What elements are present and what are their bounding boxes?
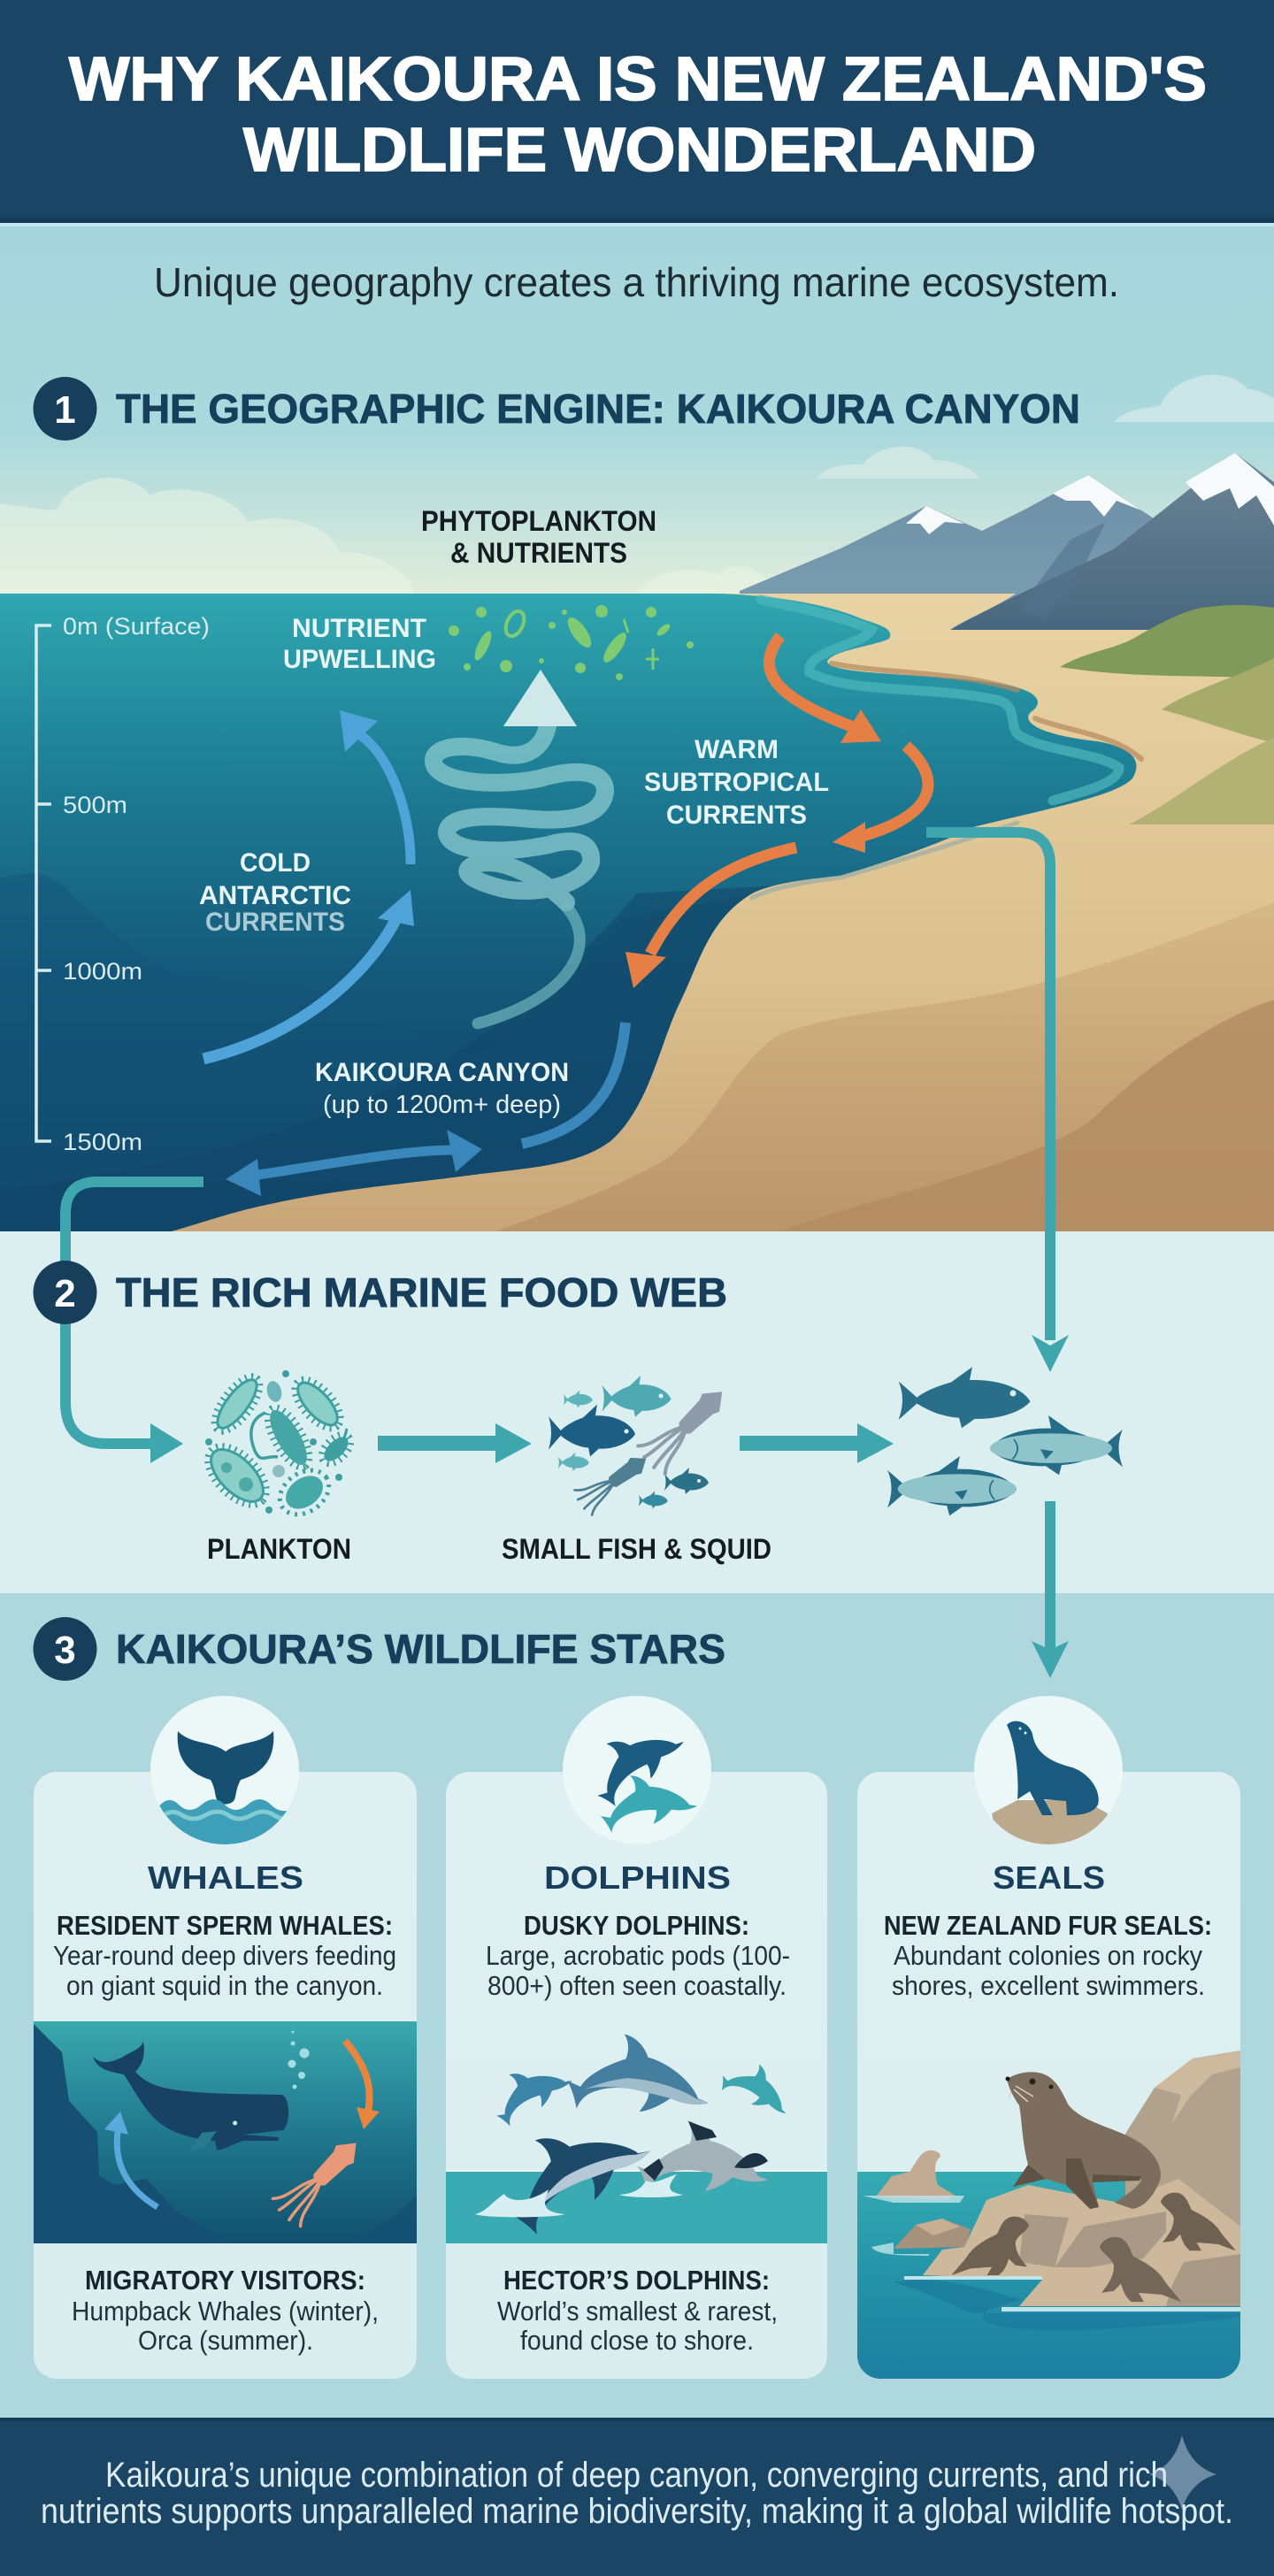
- lagoon highlights and shoreline: [752, 600, 1141, 898]
- undersea hills: [0, 874, 796, 1231]
- depth scale: 0m (Surface): [63, 613, 210, 640]
- water labels: NUTRIENT: [292, 614, 426, 643]
- arrow: small fish to large fish: [740, 1423, 894, 1463]
- panel: wildlife stars background: [0, 1593, 1274, 2418]
- connector arrow: fish to wildlife stars: [1032, 1501, 1069, 1678]
- card heading: SEALS: [993, 1859, 1105, 1896]
- hector's dolphins text: World’s smallest & rarest,: [497, 2296, 778, 2327]
- fur seals text: shores, excellent swimmers.: [892, 1970, 1205, 2001]
- water labels: CURRENTS: [666, 801, 807, 830]
- resident whales text: RESIDENT SPERM WHALES:: [57, 1910, 393, 1941]
- depth scale: [36, 613, 210, 1155]
- hector's dolphins text: HECTOR’S DOLPHINS:: [503, 2265, 770, 2296]
- migratory visitors text: Orca (summer).: [138, 2325, 313, 2356]
- connector arrow: canyon to plankton: [65, 1182, 203, 1463]
- spiral upwelling arrow: [434, 670, 605, 1024]
- water labels: UPWELLING: [283, 645, 436, 674]
- connector arrow: canyon to predatory fish: [926, 832, 1069, 1372]
- title: WHY KAIKOURA IS NEW ZEALAND'S: [69, 44, 1207, 113]
- phytoplankton particles: [449, 605, 694, 680]
- phytoplankton label: & NUTRIENTS: [450, 537, 627, 569]
- cold Antarctic current arrows: [203, 710, 414, 1059]
- depth scale: 1500m: [63, 1129, 142, 1155]
- water labels: COLD: [240, 848, 311, 878]
- resident whales text: on giant squid in the canyon.: [66, 1970, 383, 2001]
- resident whales text: Year-round deep divers feeding: [53, 1940, 396, 1971]
- depth scale: 500m: [63, 792, 127, 818]
- migratory visitors text: [72, 2265, 379, 2356]
- resident whales text: [53, 1910, 396, 2001]
- green hills: [1060, 605, 1274, 824]
- card: seals: [857, 1696, 1240, 2379]
- phytoplankton label: PHYTOPLANKTON: [421, 505, 656, 537]
- footer summary: [41, 2456, 1233, 2531]
- warm subtropical current arrows: [625, 636, 928, 988]
- depth scale: 1000m: [63, 958, 142, 985]
- card: dolphins: [446, 1696, 827, 2379]
- dusky dolphins text: [486, 1910, 790, 2001]
- mountains: [740, 453, 1274, 672]
- card: whales: [34, 1696, 417, 2379]
- section heading 1: THE GEOGRAPHIC ENGINE: KAIKOURA CANYON: [116, 386, 1080, 432]
- dusky dolphins text: 800+) often seen coastally.: [487, 1970, 787, 2001]
- water labels: WARM: [695, 735, 779, 764]
- water labels: SUBTROPICAL: [644, 768, 829, 797]
- illustration: leaping dolphins: [446, 2031, 827, 2243]
- icon: large predatory fish: [887, 1367, 1123, 1515]
- section heading 1: [34, 377, 1080, 441]
- dusky dolphins text: DUSKY DOLPHINS:: [524, 1910, 749, 1941]
- header banner: [0, 0, 1274, 223]
- hector's dolphins text: found close to shore.: [520, 2325, 754, 2356]
- title: [69, 44, 1207, 184]
- migratory visitors text: Humpback Whales (winter),: [72, 2296, 379, 2327]
- card heading: DOLPHINS: [544, 1859, 731, 1896]
- fur seals text: [884, 1910, 1212, 2001]
- section heading 1: 1: [54, 388, 76, 432]
- icon: seal badge: [974, 1696, 1123, 1849]
- panel: food web background: [0, 1231, 1274, 1593]
- water labels: KAIKOURA CANYON: [315, 1058, 569, 1087]
- icon: sparkle mark: [1149, 2435, 1216, 2510]
- small fish label: SMALL FISH & SQUID: [502, 1533, 771, 1565]
- clouds: [0, 375, 1274, 594]
- arrow: plankton to small fish: [378, 1423, 532, 1463]
- ocean water: [0, 594, 1136, 1231]
- canyon floor currents: [226, 1023, 625, 1196]
- hector's dolphins text: [497, 2265, 778, 2356]
- icon: whale tail badge: [150, 1696, 299, 1849]
- section heading 2: [34, 1261, 727, 1324]
- fur seals text: NEW ZEALAND FUR SEALS:: [884, 1910, 1212, 1941]
- section heading 2: THE RICH MARINE FOOD WEB: [116, 1269, 727, 1315]
- dusky dolphins text: Large, acrobatic pods (100-: [486, 1940, 790, 1971]
- illustration: seal colony: [857, 2051, 1240, 2379]
- section heading 3: KAIKOURA’S WILDLIFE STARS: [116, 1626, 725, 1672]
- water labels: ANTARCTIC: [199, 881, 351, 910]
- section heading 3: 3: [54, 1629, 76, 1672]
- plankton label: PLANKTON: [207, 1533, 351, 1565]
- illustration: sperm whale and squid: [34, 2021, 417, 2243]
- migratory visitors text: MIGRATORY VISITORS:: [85, 2265, 365, 2296]
- icon: dolphin badge: [563, 1696, 711, 1844]
- footer banner: [0, 2418, 1274, 2576]
- water labels: CURRENTS: [205, 908, 345, 937]
- icon: plankton cluster: [198, 1370, 355, 1523]
- phytoplankton label: [421, 505, 656, 569]
- card heading: WHALES: [148, 1859, 303, 1896]
- darker sand layers: [495, 902, 1274, 1231]
- water labels: [199, 614, 829, 1119]
- panel: geographic engine scene: [0, 223, 1274, 1231]
- fur seals text: Abundant colonies on rocky: [894, 1940, 1202, 1971]
- section heading 3: [34, 1617, 725, 1681]
- water labels: (up to 1200m+ deep): [323, 1091, 561, 1119]
- sand coast: [171, 594, 1274, 1231]
- subtitle: Unique geography creates a thriving marine ecosystem.: [154, 259, 1119, 305]
- title: WILDLIFE WONDERLAND: [243, 115, 1036, 184]
- icon: small fish and squid: [549, 1376, 736, 1516]
- section heading 2: 2: [54, 1272, 76, 1315]
